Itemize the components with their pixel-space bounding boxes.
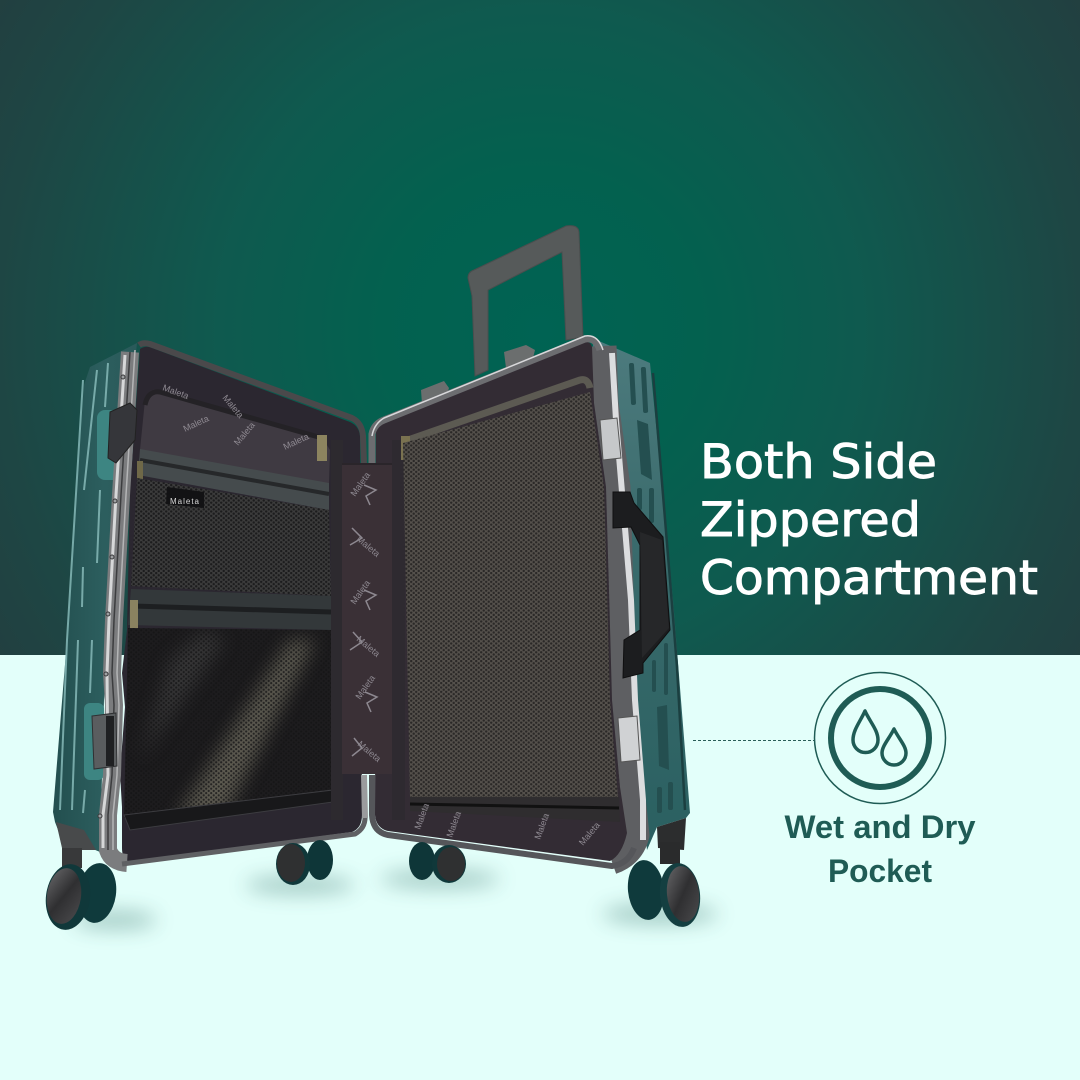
lower mesh panel (124, 628, 333, 820)
left frame (103, 343, 365, 864)
heading: both side zippered compartment: Compartment (700, 551, 1038, 606)
lining logo marks: Maleta (282, 431, 310, 452)
divider logo marks: Maleta (348, 578, 372, 606)
callout dashed leader line (693, 740, 815, 742)
divider logo marks: Maleta (355, 534, 382, 559)
heading: both side zippered compartment: Both Side (700, 435, 937, 490)
lining logo marks: Maleta (577, 820, 602, 847)
lining logo marks: Maleta (220, 393, 245, 420)
callout label: wet and dry pocket: Pocket (828, 853, 932, 889)
handle grip (640, 532, 669, 658)
right mesh panel (403, 392, 618, 797)
carry handle (613, 492, 670, 678)
zip pull (137, 461, 143, 489)
brand label: Maleta (170, 497, 200, 506)
lining logo marks: Maleta (232, 420, 257, 447)
lining logo marks (161, 382, 602, 847)
brand label (166, 487, 204, 508)
divider logo marks: Maleta (348, 470, 372, 498)
lower zip band (124, 790, 333, 830)
background: dark green radial top (0, 0, 1080, 655)
left rivets (98, 375, 125, 818)
shell grooves and recesses (629, 363, 673, 813)
centre divider flap (342, 464, 392, 774)
lining logo marks: Maleta (444, 810, 463, 839)
lining logo marks: Maleta (161, 382, 190, 401)
upper zip band (138, 449, 329, 510)
right shell (592, 338, 690, 850)
left shell (53, 343, 137, 852)
right rear wheels (409, 842, 466, 883)
right zip seam (405, 380, 590, 441)
right frame top and bottom edges (372, 336, 634, 866)
right lining pattern strip (392, 440, 405, 820)
right frame (604, 346, 643, 862)
divider logo marks: Maleta (353, 673, 377, 701)
icon: water drops in circles (814, 672, 946, 804)
divider logo marks: Maleta (355, 634, 382, 659)
lining logo marks: Maleta (412, 802, 431, 831)
left castor bracket (56, 822, 96, 850)
middle zip band (128, 589, 331, 630)
lining logo marks: Maleta (182, 413, 210, 434)
right interior lining (375, 342, 627, 861)
heading: both side zippered compartment (700, 435, 1038, 606)
divider logo marks: Maleta (356, 739, 383, 764)
right front wheels (625, 842, 703, 929)
top carry latches (421, 345, 535, 404)
left interior lining (120, 347, 362, 862)
left rear wheels (276, 840, 333, 885)
left front wheels (42, 848, 120, 933)
divider logo marks (348, 470, 383, 764)
callout label: wet and dry pocket (784, 809, 976, 889)
combination lock bottom (92, 713, 117, 769)
callout label: wet and dry pocket: Wet and Dry (784, 809, 976, 845)
right strip of left lining (331, 440, 343, 820)
combination lock top (108, 403, 137, 463)
lining logo marks: Maleta (532, 812, 551, 841)
right castor bracket (657, 818, 686, 850)
hinges (600, 418, 621, 460)
divider star marks (350, 485, 377, 756)
background: pale mint floor (0, 655, 1080, 1080)
floor shadows (73, 870, 718, 929)
suitcase illustration (42, 226, 703, 933)
upper inner pocket with zip (140, 389, 330, 484)
upper mesh panel (131, 478, 331, 596)
bottom zip right (410, 797, 620, 822)
trolley handle (468, 226, 583, 376)
heading: both side zippered compartment: Zippered (700, 493, 921, 548)
